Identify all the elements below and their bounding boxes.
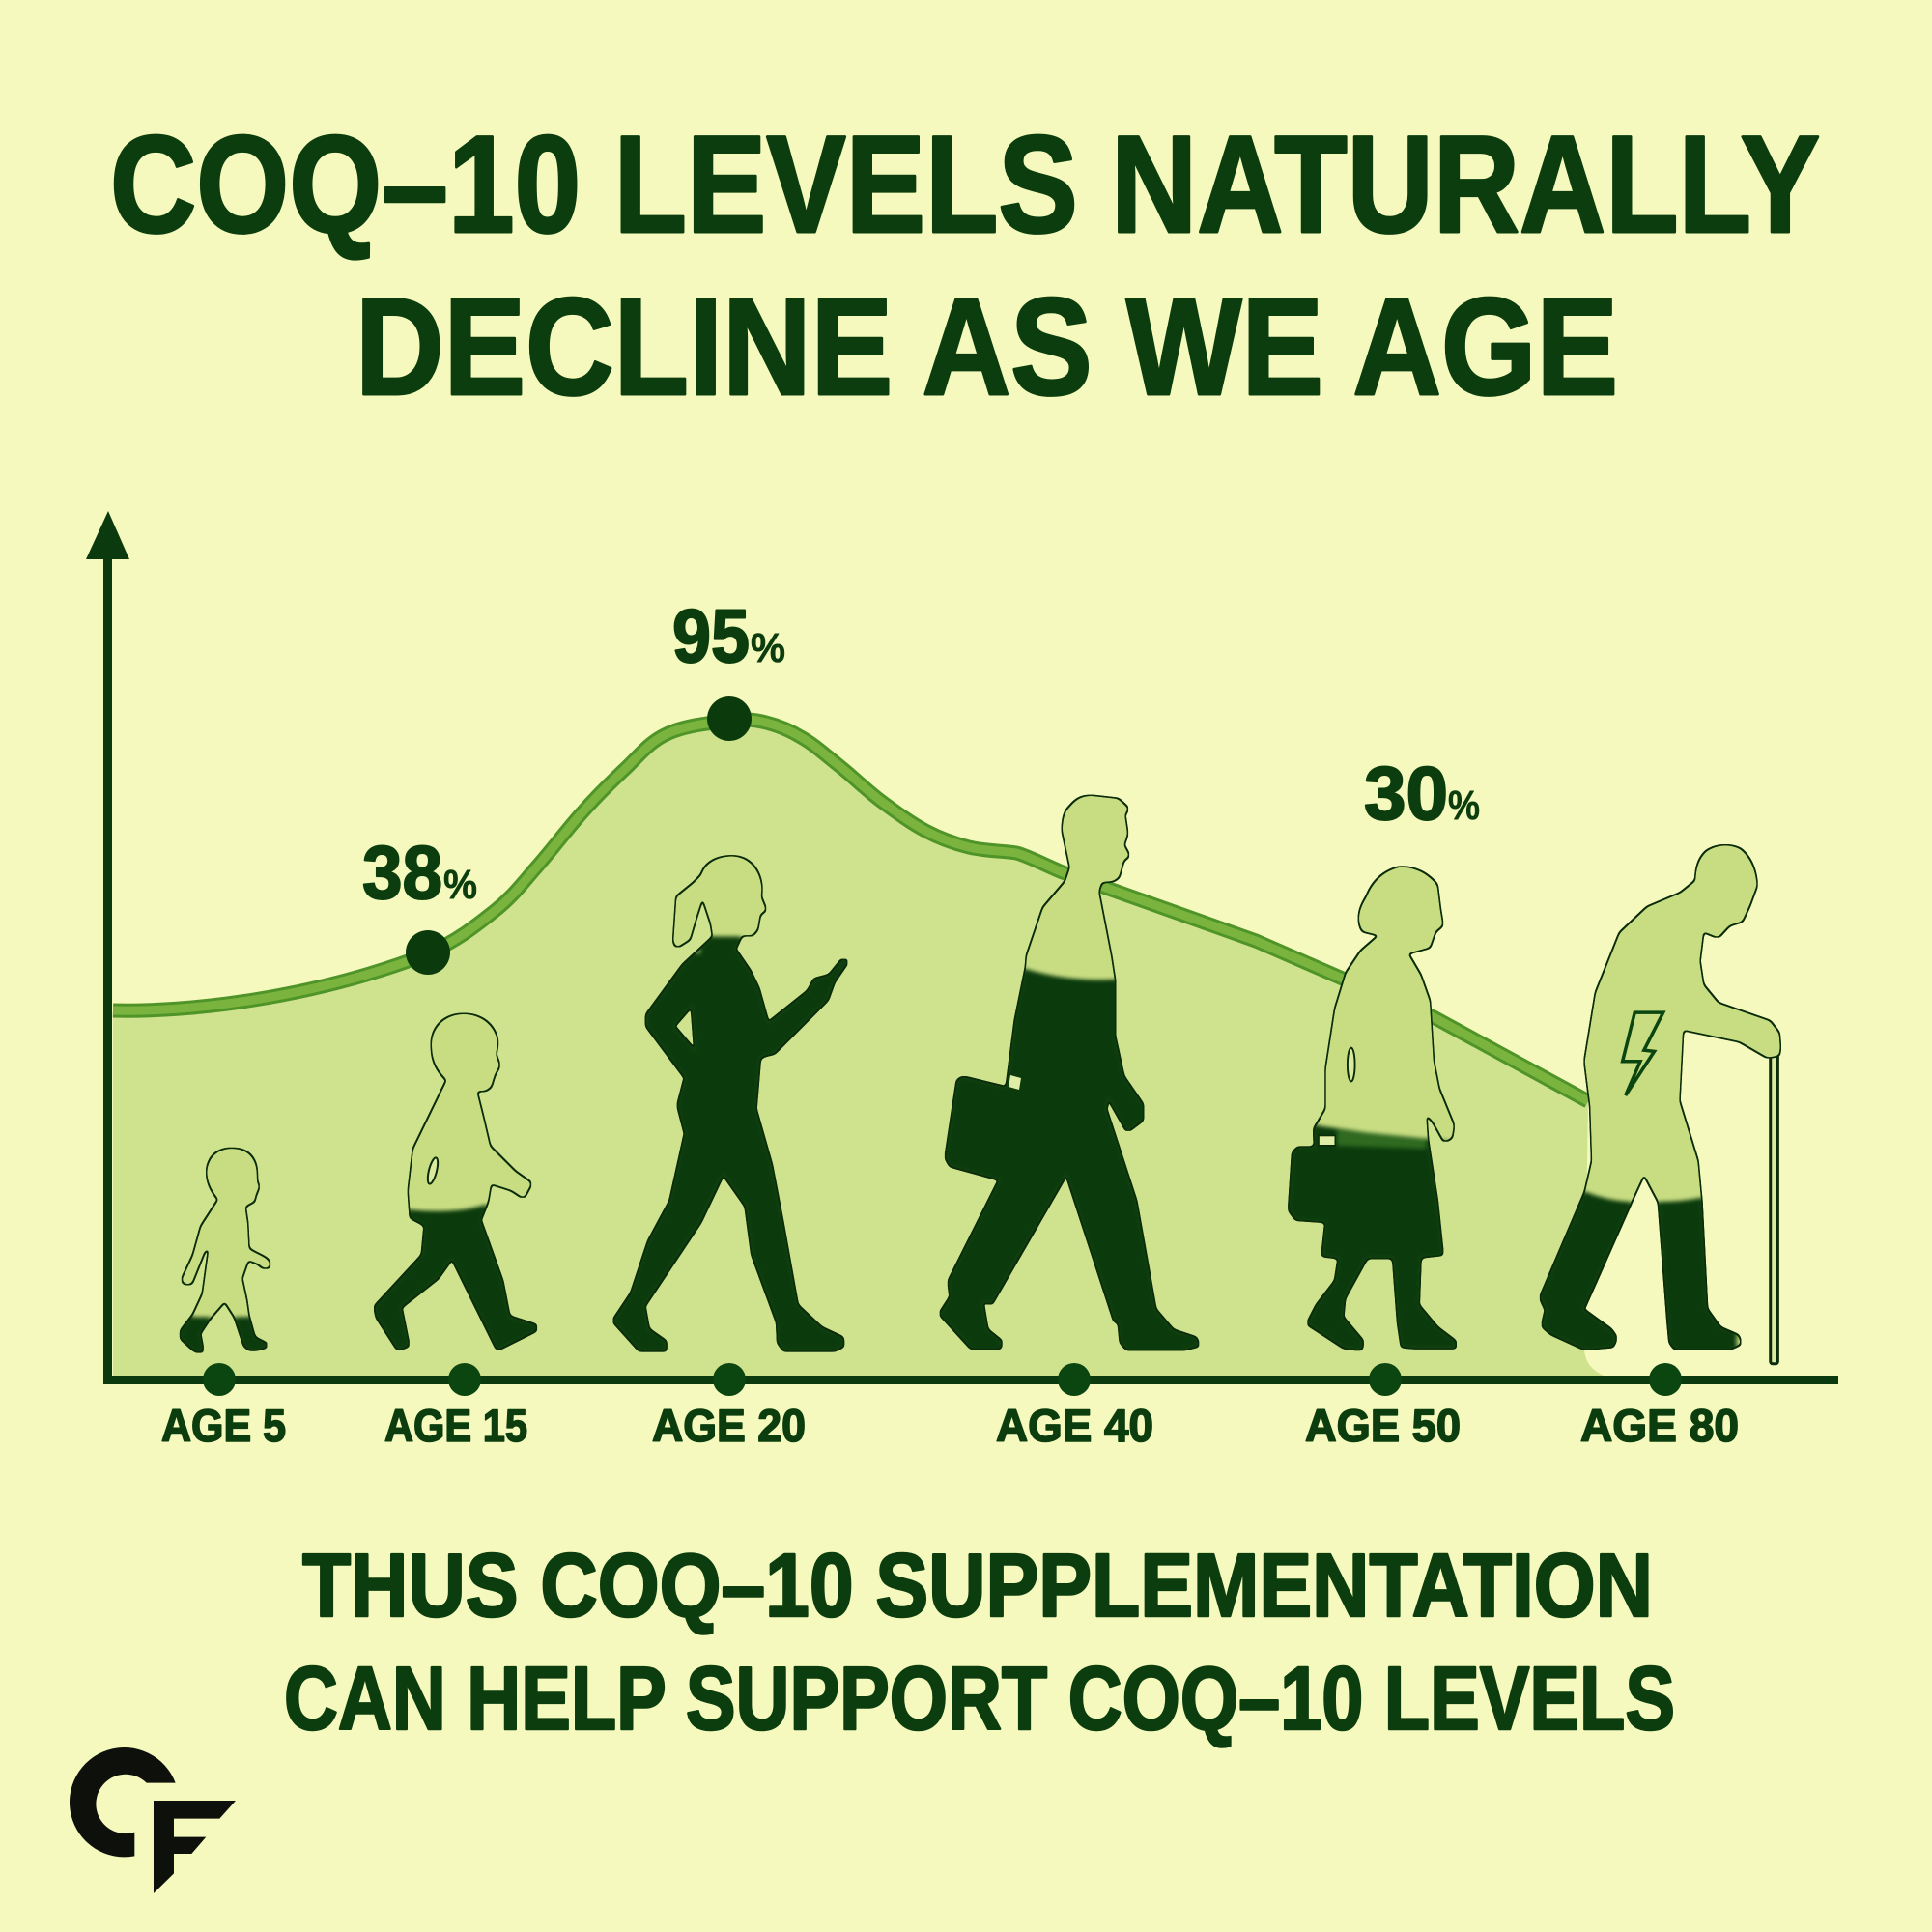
conclusion text xyxy=(284,1535,1675,1748)
area under curve xyxy=(113,720,1604,1376)
figure: age 15 boy xyxy=(375,1014,536,1350)
age labels xyxy=(161,1400,1739,1451)
value 38%: % xyxy=(443,862,477,908)
conclusion text: THUS COQ–10 SUPPLEMENTATION xyxy=(302,1535,1653,1635)
age labels: AGE 50 xyxy=(1305,1400,1461,1451)
cane xyxy=(1771,1053,1777,1364)
icon: lightning bolt xyxy=(1623,1012,1663,1095)
logo: CF xyxy=(70,1747,236,1893)
figure: age 50 woman with bag xyxy=(1289,867,1456,1350)
x axis xyxy=(103,1376,1838,1384)
figure: age 20 woman xyxy=(613,856,848,1350)
value 30%: 30 xyxy=(1364,751,1448,836)
age labels: AGE 15 xyxy=(384,1400,527,1451)
curve dot: age 15 xyxy=(406,930,450,975)
curve line xyxy=(113,720,1588,1101)
figure: age 5 child xyxy=(181,1149,270,1352)
y axis arrow xyxy=(86,511,129,1384)
figure: age 80 man with cane xyxy=(1541,845,1780,1364)
age labels: AGE 5 xyxy=(161,1400,286,1451)
age labels: AGE 20 xyxy=(652,1400,806,1451)
axis ticks xyxy=(203,1363,1682,1396)
curve dot: age 20 xyxy=(707,696,752,741)
age labels: AGE 40 xyxy=(996,1400,1153,1451)
value 95%: % xyxy=(751,625,785,671)
value 30%: % xyxy=(1448,782,1480,829)
title: DECLINE AS WE AGE xyxy=(355,270,1618,424)
value 38%: 38 xyxy=(362,830,442,915)
chart xyxy=(86,511,1838,1451)
age labels: AGE 80 xyxy=(1580,1400,1739,1451)
value 95%: 95 xyxy=(672,593,750,678)
title xyxy=(110,108,1820,424)
figure: age 40 man with briefcase xyxy=(940,796,1199,1350)
conclusion text: CAN HELP SUPPORT COQ–10 LEVELS xyxy=(284,1648,1675,1748)
